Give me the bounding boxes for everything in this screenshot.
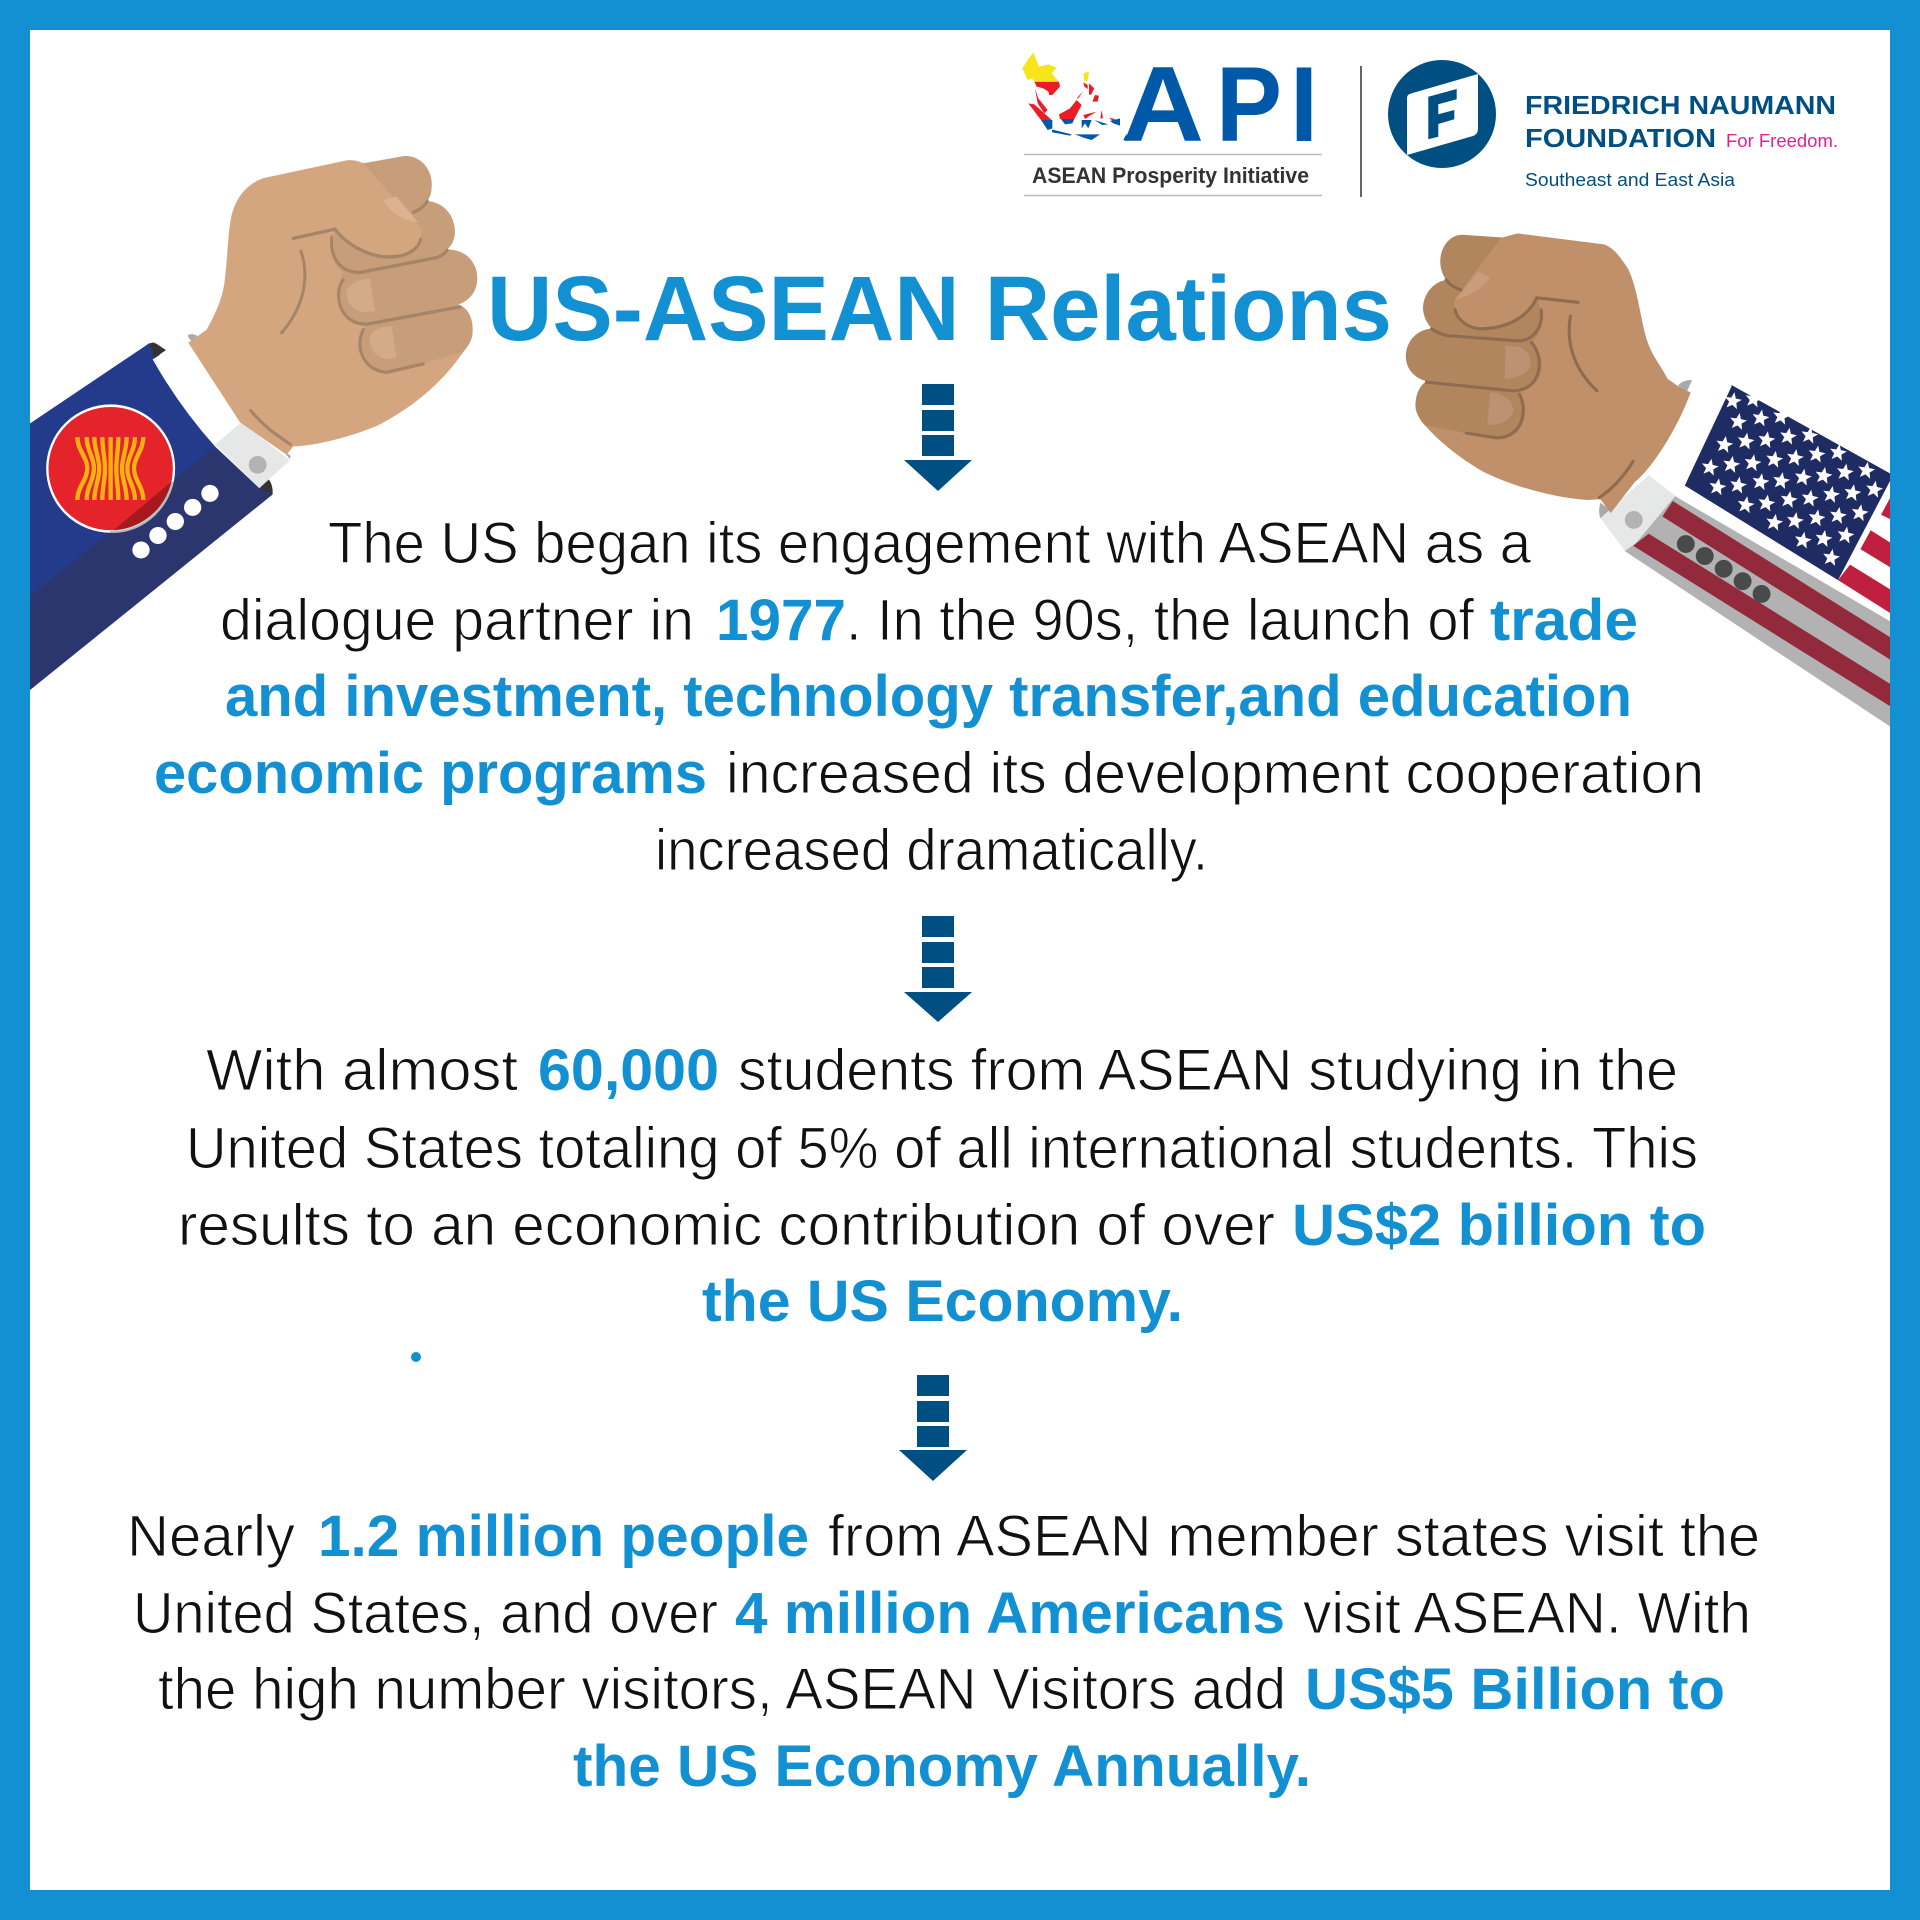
foundation name: FRIEDRICH NAUMANN — [1525, 90, 1836, 120]
arrow 3 — [899, 1375, 967, 1481]
text block: visitors: 1.2 million people — [318, 1504, 809, 1569]
text block: visitors: US$5 Billion to — [1305, 1657, 1725, 1722]
shirt cuff — [1599, 380, 1732, 551]
logo: Friedrich Naumann Foundation — [1388, 60, 1838, 190]
text block: students: the US Economy. — [702, 1269, 1183, 1334]
text block: students: US$2 billion to — [1292, 1193, 1706, 1258]
text block: engagement history: The US began its engagement with ASEAN as a — [328, 511, 1532, 576]
region: Southeast and East Asia — [1525, 170, 1736, 190]
illustration: US fist with flag sleeve — [1406, 233, 1917, 744]
text block: engagement history: 1977 — [716, 588, 846, 653]
tagline: For Freedom. — [1726, 131, 1838, 151]
logo: ASEAN Prosperity Initiative — [1022, 44, 1322, 196]
hand — [1406, 233, 1691, 513]
logo: Friedrich Naumann Foundation: FOUNDATION — [1525, 123, 1716, 153]
text block: visitors: visit ASEAN. With — [1303, 1581, 1751, 1646]
text block: visitors: from ASEAN member states visit the — [828, 1504, 1760, 1569]
text block: students: students from ASEAN studying in the — [738, 1038, 1678, 1103]
text block: visitors: United States, and over — [133, 1581, 718, 1646]
text block: engagement history: economic programs — [154, 741, 707, 806]
API wordmark — [1122, 44, 1318, 164]
icon: F circle — [1388, 60, 1496, 168]
hand — [188, 156, 477, 455]
text block: students: United States totaling of 5% of all international students. This — [186, 1116, 1698, 1181]
text block: visitors: the US Economy Annually. — [573, 1734, 1311, 1799]
flag sleeve — [1624, 385, 1917, 744]
API wordmark: A — [1122, 44, 1204, 164]
ASEAN Prosperity Initiative label: ASEAN Prosperity Initiative — [1032, 163, 1309, 188]
illustration: ASEAN fist with sleeve — [27, 156, 477, 691]
text block: engagement history: increased its development cooperation — [726, 741, 1704, 806]
icon: Southeast Asia map — [1022, 52, 1127, 141]
arrow 2 — [904, 916, 972, 1022]
text block: students: With almost — [206, 1038, 518, 1103]
text block: students — [178, 1038, 1706, 1334]
text block: visitors: Nearly — [127, 1504, 295, 1569]
text block: engagement history — [154, 511, 1704, 883]
API wordmark: I — [1290, 44, 1318, 164]
text block: engagement history: trade — [1490, 588, 1638, 653]
arrow 1 — [904, 384, 972, 491]
text block: visitors — [127, 1504, 1760, 1799]
text block: students: results to an economic contribution of over — [178, 1193, 1275, 1258]
text block: students: 60,000 — [538, 1038, 719, 1103]
title: US-ASEAN Relations — [487, 258, 1392, 360]
text block: visitors: the high number visitors, ASEAN Visitors add — [158, 1657, 1286, 1722]
ASEAN emblem badge — [47, 406, 177, 537]
text block: engagement history: and investment, technology transfer,and education — [225, 664, 1632, 729]
stray dot — [411, 1352, 421, 1362]
text block: visitors: 4 million Americans — [735, 1581, 1285, 1646]
text block: engagement history: dialogue partner in — [220, 588, 694, 653]
API wordmark: P — [1216, 44, 1282, 164]
text block: engagement history: increased dramatically. — [655, 818, 1208, 883]
sleeve — [27, 343, 273, 691]
sleeve buttons — [132, 485, 219, 558]
shirt cuff — [153, 334, 291, 488]
text block: engagement history: . In the 90s, the launch of — [846, 588, 1475, 653]
